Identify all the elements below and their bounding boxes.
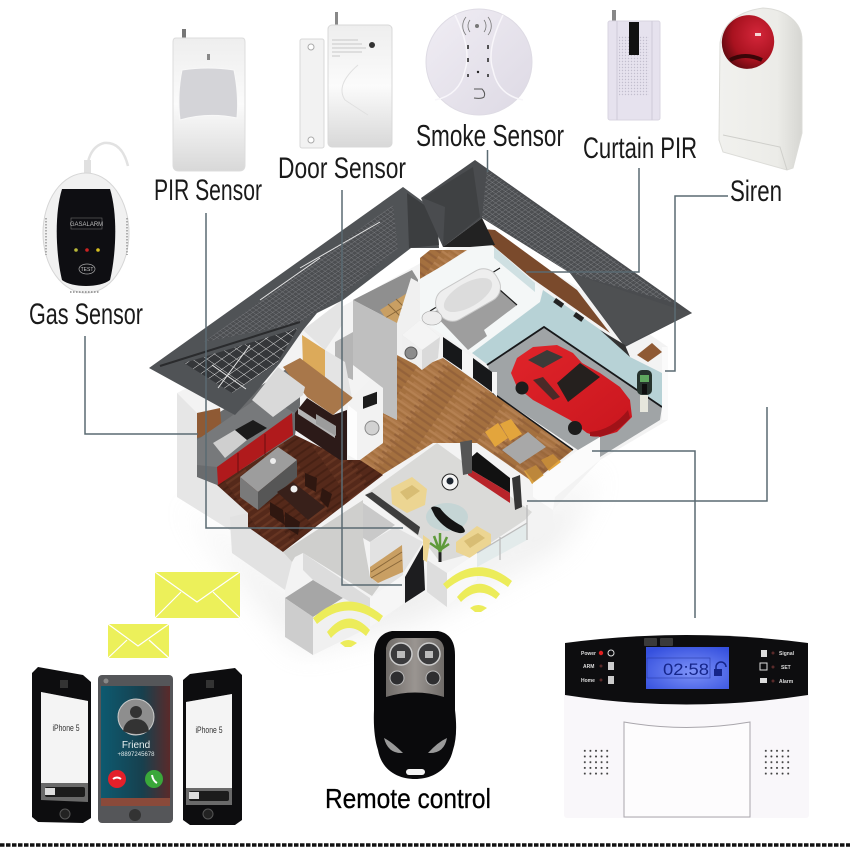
washer bbox=[402, 320, 440, 370]
lcd screen: 02:58 bbox=[663, 660, 709, 679]
icon: smoke sensor bbox=[426, 9, 532, 115]
kitchen island bbox=[240, 447, 297, 510]
closet floor bbox=[353, 270, 420, 323]
house illustration bbox=[149, 160, 692, 655]
icon: PIR sensor bbox=[173, 29, 245, 171]
garage wall bbox=[472, 290, 662, 407]
fridge bbox=[348, 380, 383, 460]
lower front walls bbox=[370, 553, 477, 627]
phone: centre with incoming call: Friend bbox=[122, 740, 150, 751]
phone: left bbox=[32, 667, 91, 823]
icon: door sensor bbox=[300, 12, 392, 148]
icon: wifi signal right bbox=[443, 567, 512, 612]
status labels left: ARM bbox=[583, 664, 594, 670]
label: door sensor: Door Sensor bbox=[278, 152, 406, 185]
icon: gas sensor: TEST bbox=[81, 267, 93, 273]
status labels right bbox=[760, 650, 795, 685]
icon: large envelope bbox=[155, 572, 240, 618]
red car bbox=[511, 345, 632, 437]
glass railing bbox=[477, 505, 527, 567]
phone: centre with incoming call: +8897245678 bbox=[118, 752, 155, 758]
wood under dining bbox=[520, 447, 571, 482]
coffee table and lounge bbox=[426, 503, 468, 533]
bathroom bbox=[418, 240, 540, 353]
speaker grille right bbox=[763, 748, 791, 776]
oven cabinet bbox=[295, 398, 347, 460]
second armchair bbox=[456, 526, 491, 558]
label: siren: Siren bbox=[730, 175, 782, 208]
phone: left: iPhone 5 bbox=[52, 723, 80, 733]
partition wall bbox=[353, 300, 397, 420]
icon: gas sensor bbox=[43, 143, 129, 293]
robot vacuum bbox=[442, 474, 458, 490]
phone: right: iPhone 5 bbox=[196, 725, 222, 735]
wood strip under roof bbox=[472, 228, 610, 333]
left roof bbox=[149, 187, 439, 415]
dining set bbox=[485, 419, 561, 484]
charger bbox=[637, 370, 652, 412]
status labels left: Home bbox=[581, 678, 595, 684]
central wood floor bbox=[360, 355, 573, 482]
living room floor bbox=[365, 443, 532, 562]
status labels right: Signal bbox=[779, 651, 795, 657]
status labels right: SET bbox=[781, 665, 791, 671]
kitchen counter bbox=[197, 395, 295, 485]
icon: remote control bbox=[374, 631, 456, 779]
leader lines bbox=[85, 150, 767, 618]
hall floor bbox=[283, 500, 380, 596]
shelf bbox=[380, 290, 413, 333]
garage floor bbox=[488, 328, 662, 457]
status labels left: Power bbox=[581, 651, 596, 657]
phone: centre with incoming call bbox=[98, 675, 173, 823]
bathtub bbox=[430, 263, 506, 327]
bottom dotted strip bbox=[0, 843, 850, 847]
panel body bbox=[564, 690, 809, 818]
label: remote control: Remote control bbox=[325, 783, 491, 814]
upper wood floor bbox=[420, 250, 467, 280]
armchair bbox=[391, 477, 427, 513]
kitchen floor bbox=[217, 435, 383, 552]
kitchen wooden door and counter bbox=[283, 335, 353, 415]
icon: small envelope bbox=[108, 624, 169, 658]
lower right white wall bbox=[533, 437, 600, 510]
label: smoke sensor: Smoke Sensor bbox=[416, 118, 564, 153]
speaker grille left bbox=[582, 748, 610, 776]
panel black fascia bbox=[565, 635, 808, 704]
kitchen back area bbox=[197, 360, 300, 485]
phone: right bbox=[183, 668, 242, 825]
icon: siren bbox=[713, 7, 802, 170]
tv unit bbox=[460, 440, 522, 510]
partition with bookshelf and door bbox=[363, 492, 430, 603]
icon: gas sensor: GASALARM bbox=[70, 222, 103, 228]
house outer walls bbox=[177, 230, 668, 655]
icon: wifi signal left bbox=[313, 601, 383, 647]
garage right wall bbox=[662, 347, 668, 420]
status labels right: Alarm bbox=[779, 679, 794, 685]
plant bbox=[430, 533, 449, 562]
status labels left bbox=[581, 650, 614, 684]
label: curtain PIR: Curtain PIR bbox=[583, 132, 697, 165]
porch box bbox=[285, 553, 370, 655]
toilet bbox=[422, 311, 442, 325]
lcd screen bbox=[646, 647, 729, 689]
label: PIR sensor: PIR Sensor bbox=[154, 174, 262, 207]
extractor hood bbox=[252, 367, 305, 417]
alarm control panel bbox=[564, 635, 809, 818]
icon: curtain PIR bbox=[608, 10, 660, 120]
right roof bbox=[421, 160, 692, 357]
black garage doors bbox=[443, 337, 497, 397]
label: gas sensor: Gas Sensor bbox=[29, 298, 143, 331]
dining table bbox=[270, 473, 332, 535]
panel door bbox=[624, 722, 750, 817]
